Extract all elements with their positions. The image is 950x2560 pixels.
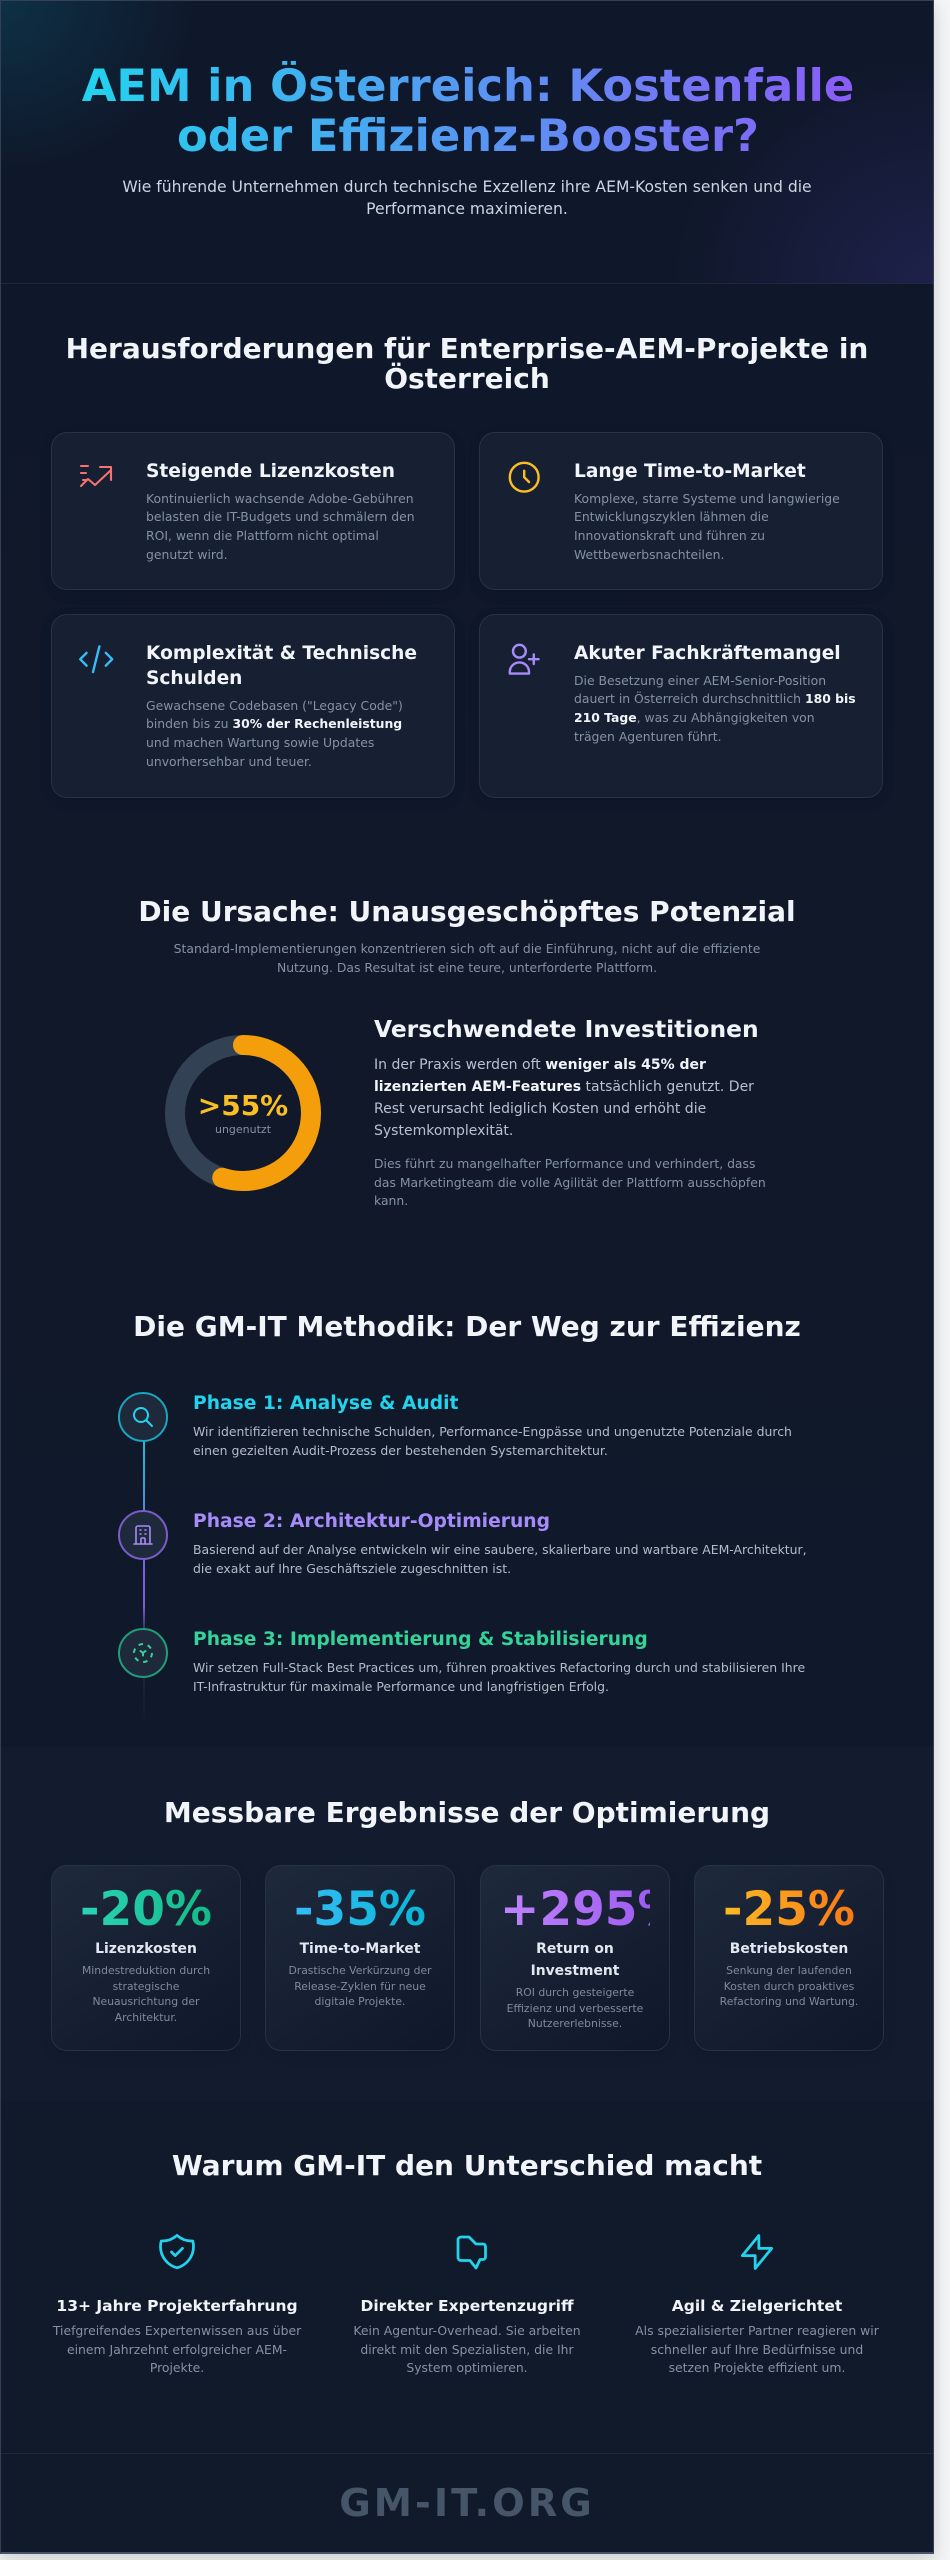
- column text: Als spezialisierter Partner reagieren wir: [635, 2323, 879, 2338]
- panel: header: [1, 1, 933, 284]
- phase 1 text: einen gezielten Audit-Prozess der bestehenden Systemarchitektur.: [193, 1443, 608, 1458]
- phase 1 text: [193, 1424, 792, 1458]
- description: Mindestreduktion durch: [82, 1964, 210, 1977]
- text: consequence: kann.: [374, 1193, 408, 1208]
- subtitle: Performance maximieren.: [366, 200, 568, 218]
- phase 1 text: Wir identifizieren technische Schulden, Performance-Engpässe und ungenutzte Potenziale durch: [193, 1424, 792, 1439]
- card text: [146, 698, 403, 769]
- description: Release-Zyklen für neue: [294, 1980, 426, 1993]
- column text: Projekte.: [150, 2360, 204, 2375]
- card text: ROI, wenn die Plattform nicht optimal: [146, 528, 379, 543]
- text: consequence: Dies führt zu mangelhafter Performance und verhindert, dass: [374, 1156, 755, 1171]
- value: -20%: [80, 1882, 212, 1937]
- text: wasted investments: In der Praxis werden oft weniger als 45% der: [374, 1057, 706, 1073]
- card text: Entwicklungszyklen lähmen die: [574, 509, 769, 524]
- card title: Komplexität & Technische: [146, 642, 417, 664]
- timeline connector: [142, 1442, 144, 1723]
- column text: schneller auf Ihre Bedürfnisse und: [651, 2342, 863, 2357]
- phase 1 icon: [118, 1392, 168, 1442]
- column text: einem Jahrzehnt erfolgreicher AEM-: [67, 2342, 287, 2357]
- donut chart: [165, 1035, 321, 1191]
- phase 1 title: Phase 1: Analyse & Audit: [193, 1393, 458, 1414]
- panel: card Steigende Lizenzkosten: [51, 432, 455, 590]
- description: [720, 1964, 858, 2008]
- subtitle: [122, 178, 812, 218]
- column: Agil: [635, 2234, 879, 2375]
- result card: Lizenzkosten: [51, 1865, 241, 2051]
- phase 3 text: IT-Infrastruktur für maximale Performance und langfristigen Erfolg.: [193, 1679, 609, 1694]
- cause intro text: Standard-Implementierungen konzentrieren sich oft auf die Einführung, nicht auf die effiziente: [174, 941, 760, 956]
- icon: user plus: [508, 644, 540, 675]
- description: [507, 1986, 643, 2030]
- text: wasted investments: lizenzierten AEM-Features tatsächlich genutzt. Der: [374, 1079, 754, 1095]
- column: Projekterfahrung: [52, 2234, 302, 2375]
- panel: results background: [1, 1747, 933, 2101]
- subheading: wasted investments: Verschwendete Investitionen: [374, 1015, 759, 1043]
- panel: card Komplexität: [51, 614, 455, 798]
- heading: results: Messbare Ergebnisse der Optimierung: [164, 1796, 770, 1829]
- card text: Gewachsene Codebasen ("Legacy Code"): [146, 698, 403, 712]
- phase 2 icon: [118, 1510, 168, 1560]
- phase 3 text: [193, 1660, 805, 1694]
- column text: [52, 2323, 302, 2375]
- value: -25%: [723, 1882, 855, 1937]
- card text: genutzt wird.: [146, 547, 228, 562]
- card text: trägen Agenturen führt.: [574, 729, 722, 744]
- description: [288, 1964, 432, 2008]
- cause intro text: Nutzung. Das Resultat ist eine teure, unterforderte Plattform.: [277, 960, 657, 975]
- icon: lightning: [740, 2234, 774, 2270]
- phase 3 text: Wir setzen Full-Stack Best Practices um, führen proaktives Refactoring durch und stabilisieren Ihre: [193, 1660, 805, 1675]
- card text: [574, 672, 856, 744]
- card title: Lange Time-to-Market: [574, 460, 806, 482]
- label: Betriebskosten: [730, 1941, 848, 1957]
- footer: [1, 2453, 933, 2553]
- column text: System optimieren.: [406, 2360, 528, 2375]
- description: Kosten durch proaktives: [724, 1980, 854, 1993]
- card text: dauert in Österreich durchschnittlich 180 bis: [574, 691, 856, 706]
- label: [531, 1941, 620, 1979]
- column: Expertenzugriff: [353, 2236, 581, 2375]
- card text: [574, 490, 840, 562]
- heading: challenges: Herausforderungen für Enterprise-AEM-Projekte in: [66, 332, 868, 364]
- heading: method: Die GM-IT Methodik: Der Weg zur Effizienz: [133, 1310, 801, 1343]
- column title: Agil & Zielgerichtet: [672, 2297, 842, 2315]
- description: Senkung der laufenden: [726, 1964, 852, 1977]
- card text: Wettbewerbsnachteilen.: [574, 547, 724, 562]
- result card: Betriebskosten: [694, 1865, 884, 2051]
- card text: und machen Wartung sowie Updates: [146, 735, 374, 750]
- card text: Innovationskraft und führen zu: [574, 528, 765, 543]
- card text: 210 Tage, was zu Abhängigkeiten von: [574, 710, 815, 725]
- cause intro text: [174, 941, 760, 975]
- phase 2 text: Basierend auf der Analyse entwickeln wir eine saubere, skalierbare und wartbare AEM-Architektur,: [193, 1542, 807, 1557]
- phase 3 title: Phase 3: Implementierung & Stabilisierung: [193, 1629, 648, 1650]
- card text: binden bis zu 30% der Rechenleistung: [146, 716, 402, 731]
- title: AEM in Österreich: Kostenfalle: [82, 59, 854, 112]
- phase 3 icon: [118, 1628, 168, 1678]
- description: Architektur.: [115, 2011, 177, 2024]
- description: ROI durch gesteigerte: [516, 1986, 634, 1999]
- card text: Die Besetzung einer AEM-Senior-Position: [574, 672, 826, 688]
- card text: belasten die IT-Budgets und schmälern den: [146, 509, 415, 524]
- result card: Time-to-Market: [265, 1865, 455, 2051]
- card title: Akuter Fachkräftemangel: [574, 642, 841, 664]
- card title: [146, 642, 417, 688]
- panel: card Fachkräftemangel: [479, 614, 883, 798]
- label: Lizenzkosten: [95, 1941, 197, 1957]
- card text: Kontinuierlich wachsende Adobe-Gebühren: [146, 490, 414, 506]
- description: strategische: [113, 1980, 179, 1993]
- column text: Kein Agentur-Overhead. Sie arbeiten: [353, 2323, 581, 2338]
- footer logo: GM-IT.ORG: [339, 2481, 595, 2526]
- column text: setzen Projekte effizient um.: [669, 2360, 845, 2375]
- heading: cause: Die Ursache: Unausgeschöpftes Potenzial: [138, 895, 796, 928]
- icon: shield check: [159, 2234, 195, 2270]
- donut label: ungenutzt: [215, 1123, 271, 1136]
- icon: code: [79, 645, 114, 674]
- column title: 13+ Jahre Projekterfahrung: [56, 2297, 298, 2315]
- card title: Steigende Lizenzkosten: [146, 460, 395, 482]
- card text: [146, 490, 415, 562]
- description: Refactoring und Wartung.: [720, 1995, 858, 2008]
- panel: card Lange Time-to-Market: [479, 432, 883, 590]
- label: Time-to-Market: [300, 1941, 420, 1957]
- title: [80, 61, 856, 160]
- value: -35%: [294, 1882, 426, 1937]
- text: consequence: das Marketingteam die volle Agilität der Plattform ausschöpfen: [374, 1175, 766, 1190]
- card title: Schulden: [146, 668, 242, 688]
- donut value: >55%: [198, 1089, 288, 1122]
- description: Neuausrichtung der: [92, 1995, 200, 2008]
- phase 2 text: die exakt auf Ihre Geschäftsziele zugeschnitten ist.: [193, 1561, 511, 1576]
- result card: ROI: [480, 1865, 670, 2051]
- heading: challenges: Österreich: [384, 362, 550, 394]
- phase 2 text: [193, 1542, 807, 1576]
- text: wasted investments: [374, 1057, 754, 1139]
- column text: [353, 2323, 581, 2375]
- card text: unvorhersehbar und teuer.: [146, 754, 312, 769]
- label: Return on: [536, 1941, 614, 1957]
- heading: why: Warum GM-IT den Unterschied macht: [172, 2149, 762, 2182]
- description: digitale Projekte.: [315, 1995, 405, 2008]
- description: Effizienz und verbesserte: [507, 2002, 643, 2015]
- text: consequence: [374, 1156, 766, 1208]
- card text: Komplexe, starre Systeme und langwierige: [574, 490, 840, 506]
- description: Nutzererlebnisse.: [528, 2017, 622, 2030]
- phase 2 title: Phase 2: Architektur-Optimierung: [193, 1511, 550, 1532]
- subtitle: Wie führende Unternehmen durch technische Exzellenz ihre AEM-Kosten senken und die: [122, 178, 812, 196]
- column text: direkt mit den Spezialisten, die Ihr: [360, 2342, 574, 2357]
- column title: Direkter Expertenzugriff: [360, 2297, 574, 2315]
- icon: clock: [508, 462, 540, 493]
- icon: chat bubble: [456, 2236, 487, 2270]
- value: +295%: [500, 1882, 685, 1937]
- text: wasted investments: Systemkomplexität.: [374, 1123, 513, 1139]
- icon: trending up: [80, 465, 112, 488]
- text: wasted investments: Rest verursacht lediglich Kosten und erhöht die: [374, 1101, 706, 1117]
- heading: challenges: [66, 332, 868, 394]
- description: Drastische Verkürzung der: [288, 1964, 432, 1977]
- title: oder Effizienz-Booster?: [177, 108, 759, 162]
- label: Investment: [531, 1963, 619, 1979]
- column text: [635, 2323, 879, 2375]
- column text: Tiefgreifendes Expertenwissen aus über: [53, 2323, 301, 2338]
- description: [82, 1964, 210, 2024]
